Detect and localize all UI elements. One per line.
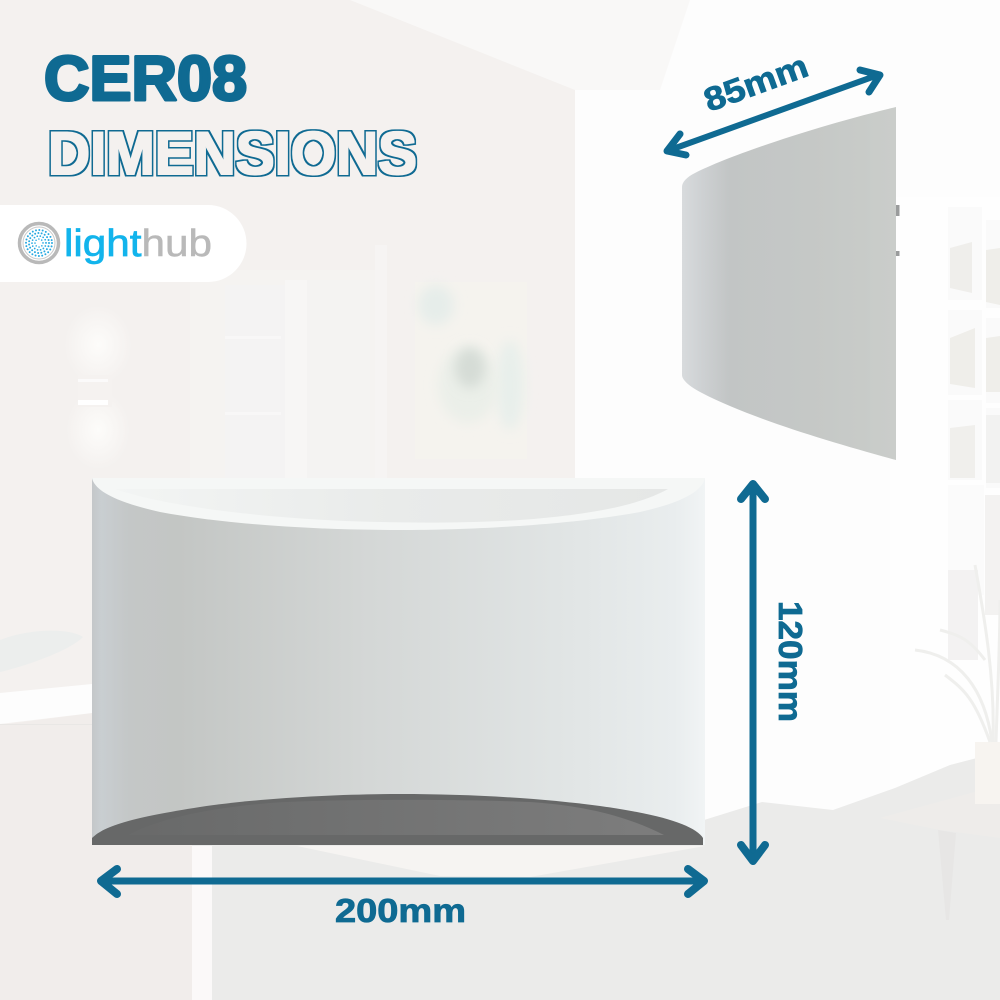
potted plant (915, 565, 1000, 742)
logo pill (0, 205, 246, 282)
floor (192, 752, 1000, 1000)
arrow: 200mm width (101, 869, 704, 894)
underside opening (92, 794, 703, 845)
side view of lamp (682, 107, 900, 460)
top lip (92, 478, 705, 530)
bookshelf (890, 197, 1000, 797)
underside recess (128, 800, 664, 835)
label: 85mm: 85mm (699, 47, 813, 119)
title: CER08: CER08 (44, 44, 247, 114)
heading: DIMENSIONS: DIMENSIONS (48, 120, 417, 187)
side table with bowl (0, 631, 92, 725)
framed painting (415, 282, 527, 459)
front view of lamp (92, 478, 705, 845)
lamp body (92, 478, 705, 845)
coffee table (880, 742, 1000, 920)
logo wordmark: lighthub (64, 223, 212, 265)
label: 120mm: 120mm (772, 601, 809, 722)
top recess (115, 489, 668, 523)
arrow: 120mm height (741, 484, 765, 861)
wall light in the background (64, 305, 132, 470)
icon: lighthub logo mark (20, 224, 58, 262)
arrow: 85mm depth (667, 70, 880, 155)
label: 200mm: 200mm (335, 892, 466, 929)
